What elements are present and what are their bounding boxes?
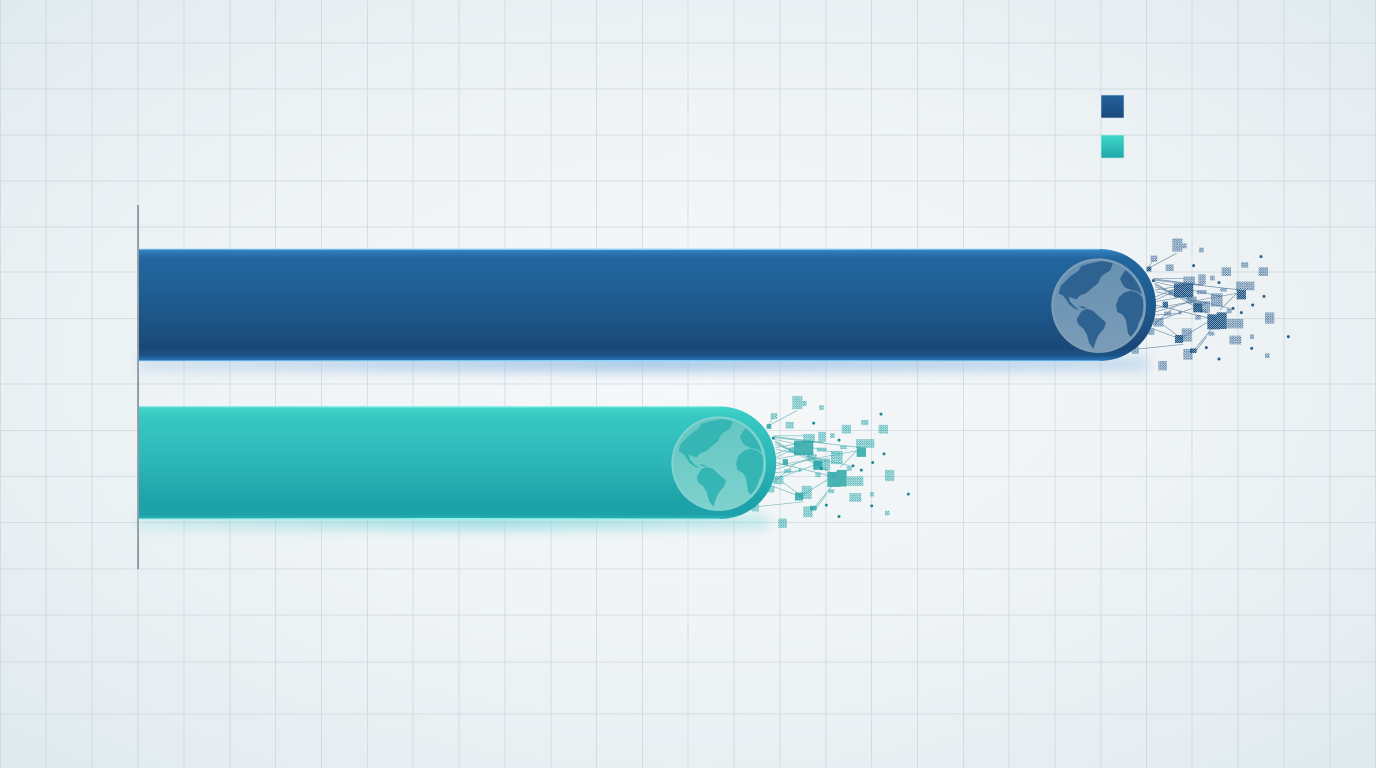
legend swatch: teal series [1101,135,1124,158]
data network: blue bar [1132,238,1288,370]
icon: globe on blue bar [1051,258,1146,353]
data network: teal bar [752,396,908,528]
legend swatch: blue series [1101,95,1124,118]
bar shadow glow: blue [138,357,1148,371]
bottom highlight: blue bar [139,360,1100,362]
top highlight: blue bar [139,248,1100,250]
icon: globe on teal bar [671,416,766,511]
bar shadow glow: teal [138,515,768,529]
bar: teal series [139,406,776,520]
bar: blue series [139,248,1156,362]
vertical axis [137,205,139,569]
top highlight: teal bar [139,406,720,408]
bottom highlight: teal bar [139,518,720,520]
